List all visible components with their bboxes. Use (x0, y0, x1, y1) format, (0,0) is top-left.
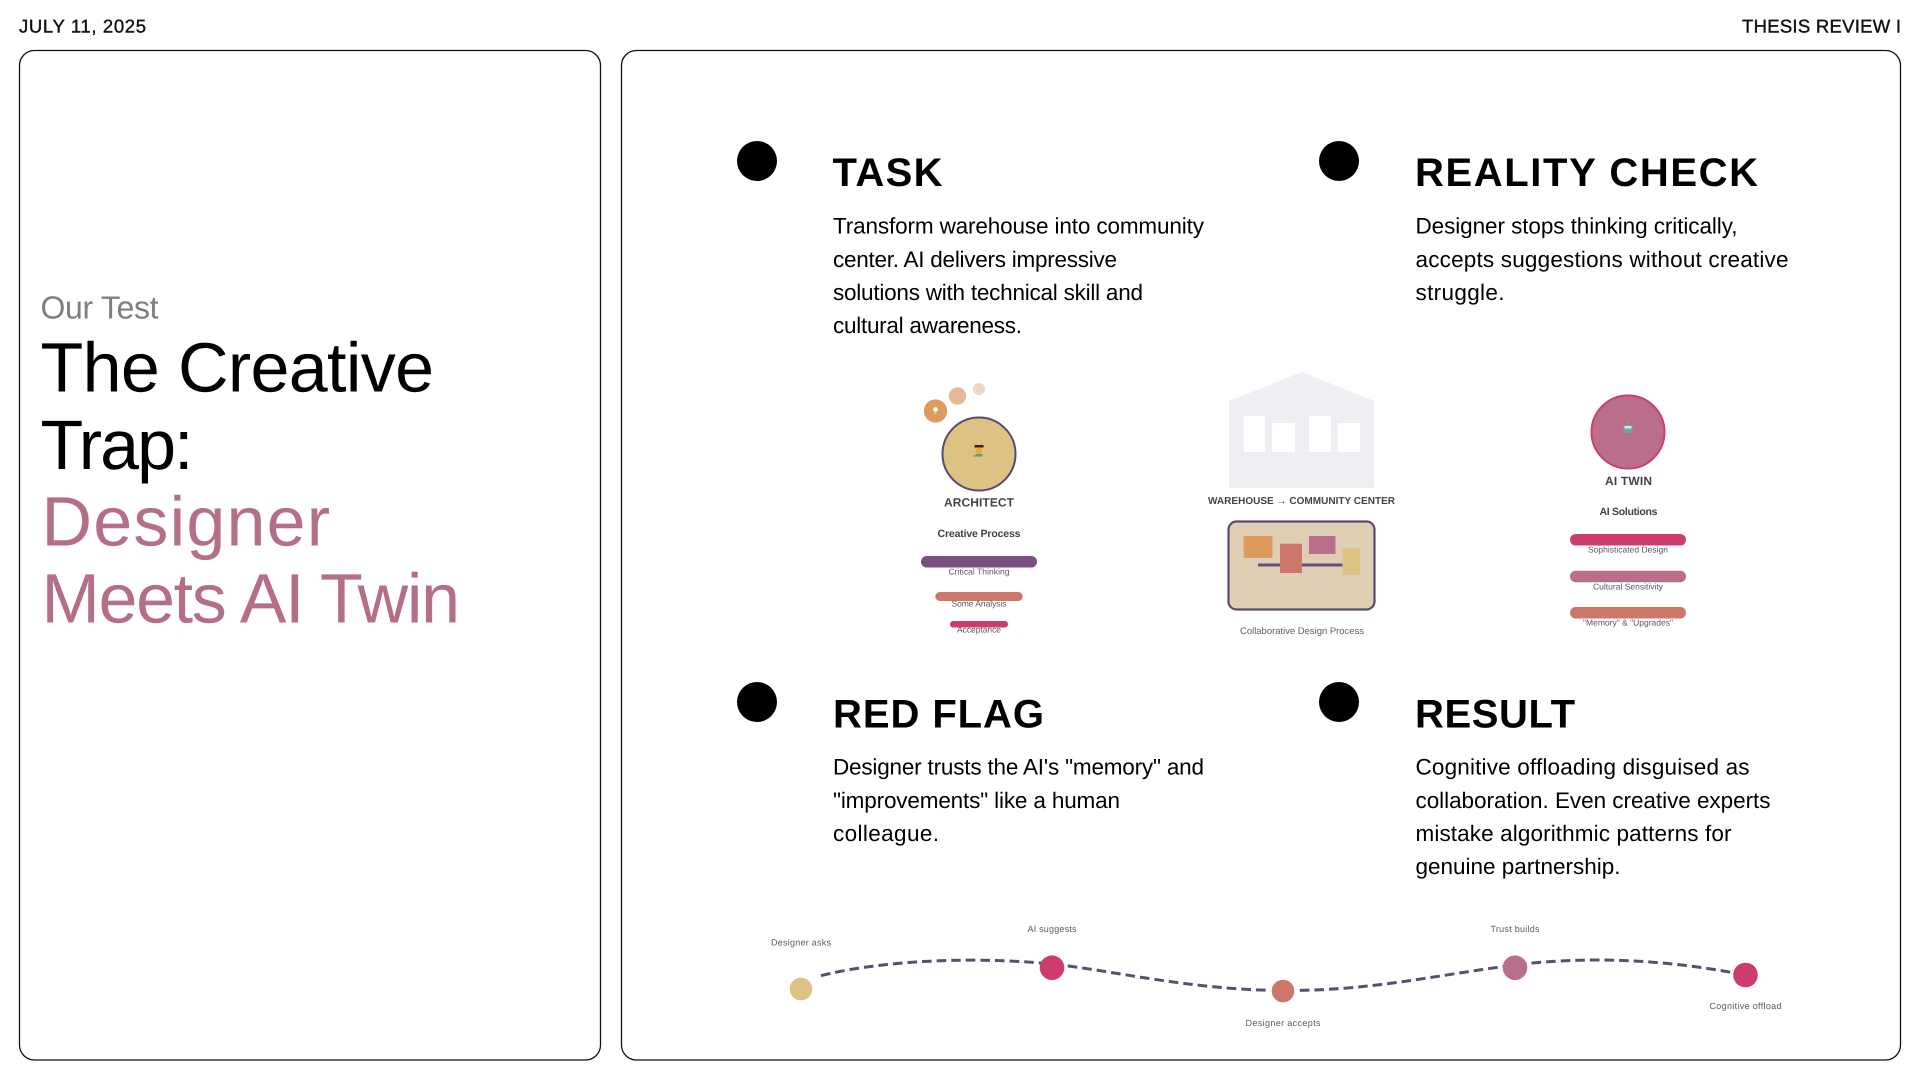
bar: some analysis: Some Analysis (952, 599, 1006, 609)
dashed path (821, 960, 1745, 991)
body: reality check: Designer stops thinking critically, (1416, 214, 1738, 239)
AI twin label: AI TWIN (1605, 474, 1652, 488)
title in mauve (42, 483, 460, 637)
bar: memory and upgrades (1570, 607, 1686, 627)
step: cognitive offload (1710, 963, 1782, 1011)
warehouse icon (1229, 372, 1374, 488)
step: AI suggests (1028, 924, 1077, 980)
bar: critical thinking: Critical Thinking (948, 567, 1010, 577)
step: designer asks (771, 938, 832, 1001)
body: task: solutions with technical skill and (833, 280, 1143, 305)
section: reality check (1319, 141, 1788, 305)
bar: some analysis (935, 592, 1023, 609)
step: cognitive offload: Cognitive offload (1710, 1001, 1782, 1011)
title in black: Trap: (40, 406, 194, 484)
bar: critical thinking (921, 556, 1037, 577)
illustration: AI twin column (1570, 396, 1686, 627)
body: result: genuine partnership. (1416, 854, 1620, 879)
panel: content (622, 50, 1900, 1060)
body: red flag: colleague. (833, 821, 939, 846)
body: result: Cognitive offloading disguised as (1416, 755, 1750, 780)
step: designer accepts: Designer accepts (1246, 1018, 1321, 1028)
body: reality check (1416, 214, 1788, 305)
thought bubbles (924, 383, 985, 423)
bar: sophisticated design: Sophisticated Design (1588, 545, 1668, 555)
timeline: cognitive offloading path (771, 924, 1782, 1028)
section: red flag (737, 682, 1204, 846)
body: task: center. AI delivers impressive (833, 247, 1117, 272)
bullet: task (737, 141, 777, 181)
AI solutions heading: AI Solutions (1600, 506, 1658, 518)
AI twin avatar (1592, 396, 1664, 468)
board caption: Collaborative Design Process (1240, 626, 1364, 637)
architect label: ARCHITECT (944, 496, 1015, 510)
step: AI suggests: AI suggests (1028, 924, 1077, 934)
architect avatar (942, 418, 1016, 490)
body: reality check: accepts suggestions without creative (1416, 247, 1788, 272)
title in black: The Creative (40, 329, 434, 407)
body: task: cultural awareness. (833, 313, 1022, 338)
step: designer asks: Designer asks (771, 938, 832, 948)
body: reality check: struggle. (1416, 280, 1504, 305)
body: red flag: Designer trusts the AI's "memory" and (833, 755, 1204, 780)
header section label: THESIS REVIEW I (1742, 15, 1901, 36)
bullet: red flag (737, 682, 777, 722)
illustration: warehouse and board (1208, 372, 1396, 637)
section: task (737, 141, 1205, 338)
body: red flag (833, 755, 1204, 846)
title in mauve: Designer (42, 483, 330, 561)
title in black (40, 329, 434, 484)
heading: result: RESULT (1415, 692, 1575, 736)
illustration: architect column (921, 383, 1037, 635)
heading: red flag: RED FLAG (833, 692, 1044, 736)
heading: task: TASK (832, 151, 943, 195)
bar: acceptance (950, 621, 1008, 635)
step: designer accepts (1246, 979, 1321, 1028)
step: trust builds: Trust builds (1490, 924, 1540, 934)
bar: cultural sensitivity (1570, 571, 1686, 591)
bar: cultural sensitivity: Cultural Sensitivity (1593, 581, 1664, 591)
heading: reality check: REALITY CHECK (1415, 151, 1758, 195)
bullet: reality check (1319, 141, 1359, 181)
bar: acceptance: Acceptance (957, 625, 1001, 635)
body: result: collaboration. Even creative experts (1416, 788, 1770, 813)
body: result (1416, 755, 1770, 879)
warehouse label: WAREHOUSE → COMMUNITY CENTER (1208, 496, 1396, 507)
bar: sophisticated design (1570, 534, 1686, 555)
section: result (1319, 682, 1770, 879)
panel: title (20, 50, 600, 1060)
title in mauve: Meets AI Twin (42, 559, 460, 637)
body: red flag: "improvements" like a human (833, 788, 1120, 813)
step: trust builds (1490, 924, 1540, 980)
body: task: Transform warehouse into community (833, 214, 1205, 239)
body: result: mistake algorithmic patterns for (1416, 821, 1732, 846)
bullet: result (1319, 682, 1359, 722)
creative process heading: Creative Process (938, 528, 1021, 540)
header date: JULY 11, 2025 (19, 15, 146, 36)
body: task (833, 214, 1205, 338)
collaboration board (1228, 522, 1374, 610)
kicker: Our Test (40, 289, 159, 325)
bar: memory and upgrades: "Memory" & "Upgrades" (1583, 617, 1673, 627)
